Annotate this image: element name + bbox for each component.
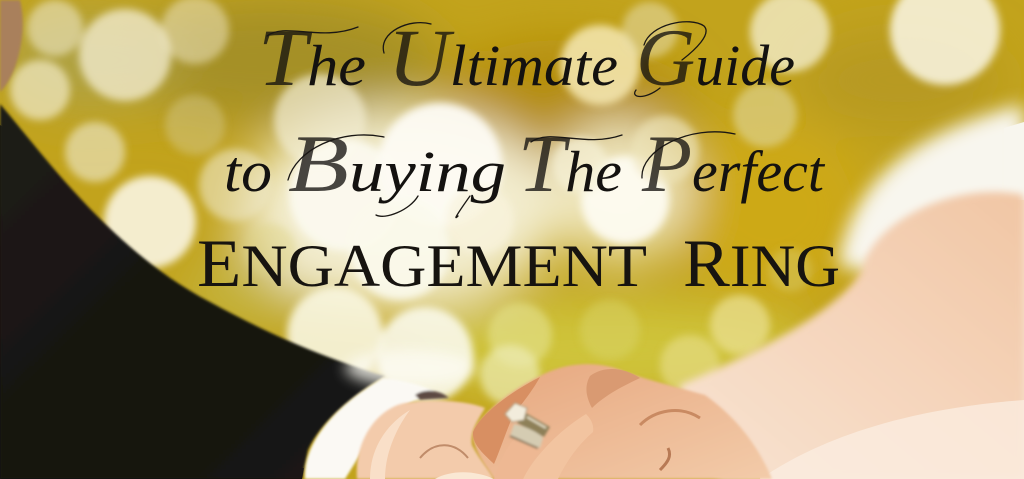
title line 1: The Ultimate Guide: Guide [636,12,795,103]
title line 3: Engagement Ring: RING [683,225,840,301]
wedding ring with diamond [505,403,550,448]
title line 1: The Ultimate Guide [258,12,795,103]
title line 1: The Ultimate Guide: The [258,12,366,103]
bride's arm [680,192,1024,479]
title line 2: to Buying The Perfect [224,118,826,218]
bride's white dress [838,104,1024,280]
groom's blurred arm, top left [0,0,23,92]
groom's jacket sleeve [0,104,385,479]
title line 2: to Buying The Perfect: to [224,139,272,204]
white shirt glow behind hands [345,350,475,386]
title line 2: to Buying The Perfect: The [518,118,622,209]
title line 3: Engagement Ring [197,225,840,301]
title line 2: to Buying The Perfect: Buying [288,118,506,209]
title line 3: Engagement Ring: ENGAGEMENT [197,225,647,301]
title line 2: to Buying The Perfect: Perfect [641,118,826,209]
bride's hand [473,364,772,479]
title line 1: The Ultimate Guide: Ultimate [388,12,618,103]
groom's hand [357,401,494,479]
groom's shirt cuff [305,378,449,479]
